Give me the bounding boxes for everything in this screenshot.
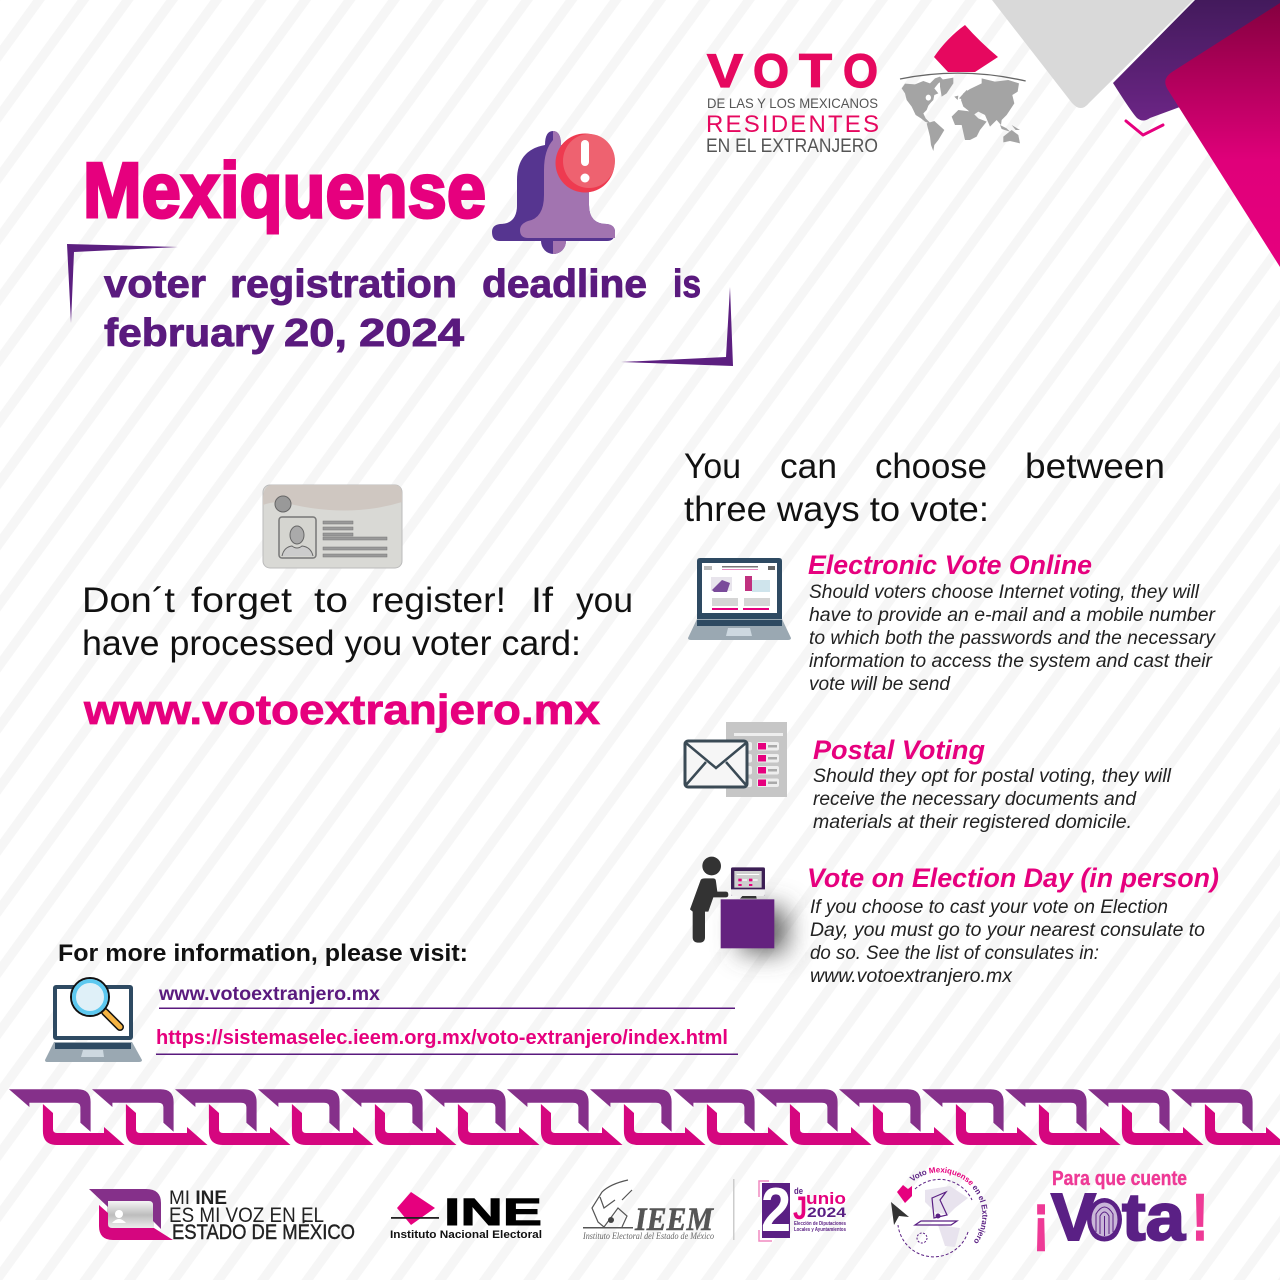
subtitle: deadline: is	[673, 263, 701, 306]
logo: voto residentes: V	[707, 44, 744, 97]
logo: voto residentes: T	[799, 44, 832, 97]
option: electronic vote: have to provide an e-mail and a mobile number	[809, 605, 1216, 626]
title: Mexiquense: Mexiquense	[83, 146, 486, 234]
text: don't forget to register: you	[576, 581, 633, 620]
option: postal voting: materials at their registered domicile.	[813, 812, 1132, 833]
logo: INE	[390, 1192, 542, 1241]
text: don't forget to register	[82, 581, 633, 663]
icon: ballot over world map	[900, 25, 1026, 151]
logo: voto mexiquense en el extranjero: Voto Mexiquense en el Extranjero	[909, 1167, 988, 1244]
heading: three ways to vote: between	[1025, 447, 1165, 486]
heading: three ways to vote: three ways to vote:	[684, 490, 989, 529]
text: don't forget to register: Don´t	[82, 581, 175, 620]
logo: IEEM: IEEM	[634, 1202, 714, 1238]
logo: mi ine: MI INE	[169, 1188, 227, 1209]
option: postal voting: receive the necessary documents and	[813, 789, 1137, 810]
link: sistemaselec: https://sistemaselec.ieem.org.mx/voto-extranjero/index.html	[156, 1027, 728, 1049]
logo: voto mexiquense en el extranjero	[891, 1167, 988, 1258]
bracket bottom-right	[621, 287, 733, 366]
text: don't forget to register: have processed you voter card:	[82, 624, 581, 663]
logo: INE: Instituto Nacional Electoral	[390, 1229, 542, 1241]
icon: voter card	[263, 485, 402, 568]
logo: 2 de junio 2024: Elección de Diputaciones	[794, 1221, 846, 1227]
link: votoextranjero: www.votoextranjero.mx	[83, 686, 601, 733]
text: don't forget to register: forget	[191, 581, 292, 620]
bracket top-left	[67, 244, 178, 323]
icon: person voting at booth	[690, 857, 786, 952]
option: electronic vote: Should voters choose Internet voting, they will	[809, 582, 1200, 603]
option: electronic vote: information to access the system and cast their	[809, 651, 1213, 672]
option: vote on election day: do so. See the list of consulates in:	[810, 943, 1099, 964]
heading: three ways to vote: choose	[875, 447, 987, 486]
logo: IEEM	[582, 1180, 714, 1241]
chain band	[9, 1089, 1280, 1145]
logo: voto residentes: RESIDENTES	[706, 111, 879, 138]
icon: bell with alert	[492, 131, 615, 254]
logo: voto residentes: DE LAS Y LOS MEXICANOS	[707, 95, 878, 111]
option: postal voting	[813, 735, 1172, 833]
subtitle: deadline: deadline	[482, 263, 647, 306]
option: vote on election day: Day, you must go to your nearest consulate to	[810, 920, 1205, 941]
option: electronic vote: Electronic Vote Online	[808, 550, 1092, 580]
link: votoextranjero small: www.votoextranjero.mx	[158, 984, 380, 1005]
icon: laptop with web page	[688, 558, 791, 640]
subtitle: deadline: voter	[104, 263, 206, 306]
logo: para que cuente vota	[1033, 1168, 1208, 1255]
logo: mi ine: ES MI VOZ EN EL	[169, 1204, 324, 1227]
logo: 2 de junio 2024: 2024	[807, 1204, 846, 1220]
text: don't forget to register: register!	[371, 581, 506, 620]
text: don't forget to register: to	[314, 581, 348, 620]
logo: 2 de junio 2024: de	[794, 1186, 803, 1196]
option: vote on election day: Vote on Election Day (in person)	[807, 863, 1219, 893]
logo: INE: INE	[444, 1192, 542, 1234]
logo: para que cuente vota: ta	[1122, 1180, 1186, 1255]
icon: laptop with magnifier	[45, 978, 142, 1062]
subtitle: deadline: 2024	[359, 312, 464, 355]
logo: voto residentes: EN EL EXTRANJERO	[706, 136, 878, 157]
logo: IEEM: Instituto Electoral del Estado de México	[582, 1231, 714, 1241]
subtitle: deadline: 20,	[284, 312, 347, 355]
logo: mi ine	[89, 1188, 355, 1244]
option: vote on election day: www.votoextranjero.mx	[810, 966, 1014, 987]
corner decoration	[992, 0, 1280, 267]
option: vote on election day	[807, 863, 1219, 987]
logo: voto residentes	[706, 44, 879, 157]
logo: para que cuente vota: !	[1192, 1180, 1208, 1254]
logo: para que cuente vota: V	[1051, 1180, 1096, 1255]
text: don't forget to register: If	[531, 581, 553, 620]
icon: envelope and ballot	[685, 722, 787, 797]
heading: three ways to vote: You	[684, 447, 741, 486]
heading: three ways to vote	[684, 447, 1165, 529]
option: postal voting: Should they opt for postal voting, they will	[813, 766, 1172, 787]
subtitle: deadline: february	[104, 312, 274, 355]
option: electronic vote: vote will be send	[809, 674, 951, 695]
option: postal voting: Postal Voting	[813, 735, 985, 765]
logo: 2 de junio 2024: J	[793, 1190, 807, 1226]
option: electronic vote	[808, 550, 1217, 695]
logo: 2 de junio 2024	[759, 1176, 846, 1245]
subtitle: deadline	[104, 263, 701, 355]
logo: 2 de junio 2024: Locales y Ayuntamientos	[794, 1227, 846, 1233]
logo: para que cuente vota: o	[1087, 1180, 1122, 1255]
heading: three ways to vote: can	[780, 447, 837, 486]
logo: voto residentes: O	[843, 44, 878, 97]
logo: para que cuente vota: ¡	[1033, 1180, 1049, 1254]
subtitle: deadline: registration	[230, 263, 457, 306]
option: vote on election day: If you choose to cast your vote on Election	[810, 897, 1168, 918]
logo: para que cuente vota: Para que cuente	[1052, 1168, 1187, 1190]
logo: 2 de junio 2024: 2	[761, 1176, 791, 1245]
option: electronic vote: to which both the passwords and the necessary	[809, 628, 1217, 649]
logo: voto residentes: O	[753, 44, 789, 97]
logo: 2 de junio 2024: unio	[806, 1189, 846, 1208]
logo: mi ine: ESTADO DE MÉXICO	[172, 1221, 355, 1244]
text: for more information: For more information, please visit:	[58, 940, 468, 967]
